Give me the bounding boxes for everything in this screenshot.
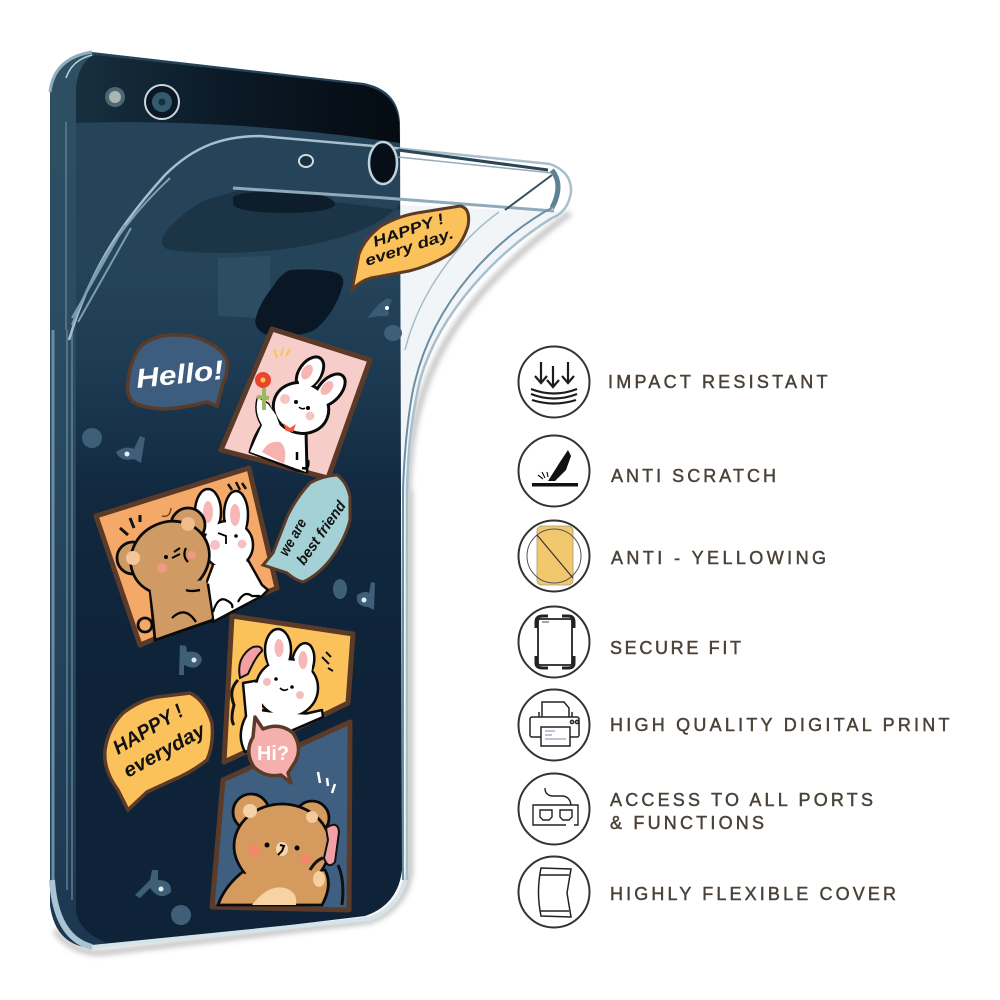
camera band [76,55,400,143]
sticker: top happy everyday bubble: every day. [363,225,456,270]
label: ANTI SCRATCH [611,466,776,486]
phone with clear case [50,52,571,953]
camera cut-out in case [369,142,397,184]
fingerprint shape [218,256,270,318]
sticker: happy everyday bubble: everyday [120,719,210,782]
sticker: top happy everyday bubble [352,206,469,290]
case outline [69,136,571,880]
sticker: hello bubble [128,335,227,409]
sticker: happy everyday bubble [105,693,212,810]
rabbit [241,629,323,752]
sticker: orange frame with bear and rabbit [96,468,277,645]
feature: highly flexible cover [518,856,896,928]
bear [218,794,330,905]
decorative notes and dots [82,298,402,925]
phone body [50,52,402,948]
flash [105,87,125,107]
icon: phone in bumper [518,606,590,678]
sticker: yellow frame with rabbit on phone [224,616,353,762]
bear [117,508,221,640]
case cut-out slot [233,192,335,213]
small case hole [299,155,313,167]
icon: ports [518,774,590,844]
label: ACCESS TO ALL PORTS [610,790,873,810]
bottom case rim [52,880,92,947]
telephone [239,646,262,678]
case drop shadow [55,213,570,953]
rabbit [195,489,268,622]
sticker: hi bubble [249,717,299,783]
sticker: navy frame with bear on phone [212,722,350,910]
feature: high quality digital print [518,690,950,760]
telephone [324,825,339,865]
bow tie [283,423,296,432]
label: IMPACT RESISTANT [608,372,828,392]
icon: printer [518,690,590,760]
feature: secure fit [518,606,741,678]
sticker: pink frame with rabbit [221,329,370,478]
case top shading [162,190,400,253]
camera lens [145,85,179,119]
rabbit [250,352,351,472]
label: SECURE FIT [610,638,741,658]
icon: flexible cover [518,856,590,928]
feature: anti yellowing [518,520,826,592]
label line two: & FUNCTIONS [610,813,764,833]
feature: anti scratch [518,436,776,506]
icon: impact arrows [518,346,590,418]
clear case flare [400,205,571,490]
left metal edge [50,52,105,948]
sticker: we are best friend bubble [263,475,350,582]
sticker: we are best friend bubble: we are [276,516,310,559]
label: HIGH QUALITY DIGITAL PRINT [610,715,950,735]
icon: blade scratching [518,436,590,506]
sticker: hello bubble: Hello! [134,355,225,394]
sticker: we are best friend bubble: best friend [293,497,350,568]
feature: access to all ports [518,774,873,844]
sticker: happy everyday bubble: HAPPY ! [109,700,188,759]
icon: yellow card crossed [518,520,590,592]
sticker: top happy everyday bubble: HAPPY ! [371,211,446,251]
label: HIGHLY FLEXIBLE COVER [610,884,896,904]
sticker: hi bubble: Hi? [257,743,289,765]
feature: impact resistant [518,346,828,418]
label: ANTI - YELLOWING [611,548,826,568]
flower [255,372,271,388]
fingerprint sensor [255,269,343,336]
